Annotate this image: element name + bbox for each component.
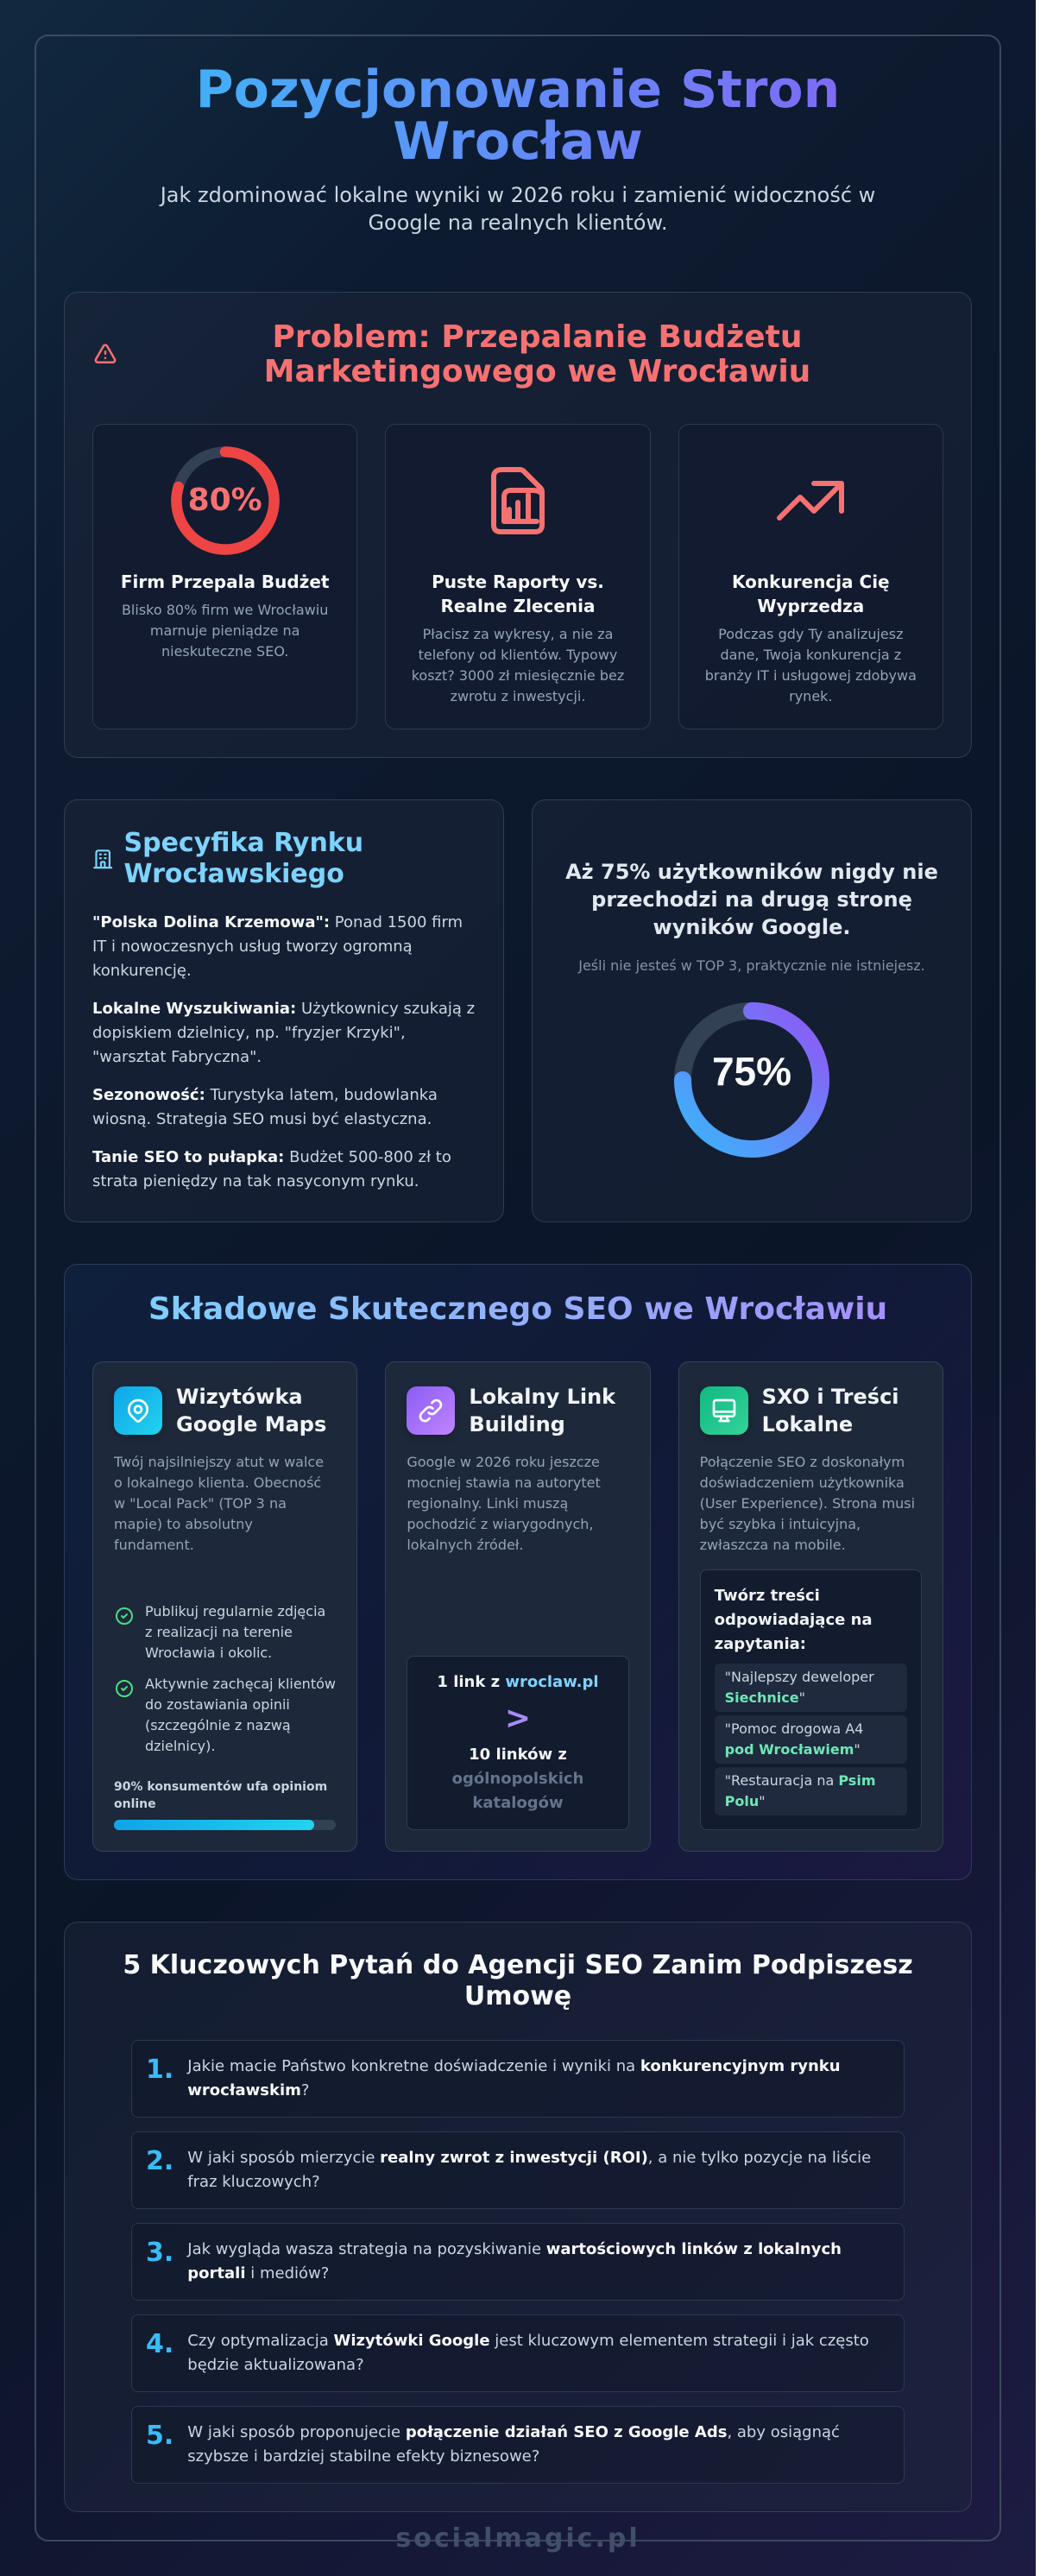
chart: 75% ring xyxy=(674,1002,829,1158)
card: 80 percent xyxy=(92,424,357,729)
title xyxy=(64,64,972,167)
card text: Płacisz za wykresy, a nie za xyxy=(423,626,613,642)
card title xyxy=(176,1385,326,1436)
panel: five questions xyxy=(64,1922,972,2512)
card text: mocniej stawia na autorytet xyxy=(407,1474,601,1491)
question text: W jaki sposób proponujecie połączenie działań SEO z Google Ads, aby osiągnąć xyxy=(187,2423,840,2441)
text: silicon valley: "Polska Dolina Krzemowa": Ponad 1500 firm xyxy=(92,913,463,931)
card text: koszt? 3000 zł miesięcznie bez xyxy=(412,667,624,684)
ten weak links xyxy=(452,1746,583,1812)
questions heading: Umowę xyxy=(464,1981,571,2011)
question text: Jakie macie Państwo konkretne doświadczenie i wyniki na konkurencyjnym rynku xyxy=(187,2057,841,2075)
question 2 xyxy=(131,2131,905,2209)
question text xyxy=(187,2329,869,2377)
stat label: online xyxy=(114,1797,156,1811)
comparison box xyxy=(407,1656,629,1830)
number: 1. xyxy=(146,2055,173,2085)
example query: pod Wrocławiem" xyxy=(725,1741,861,1758)
icon: check xyxy=(116,1680,133,1697)
question text xyxy=(187,2149,871,2191)
problem heading: Problem: Przepalanie Budżetu xyxy=(272,319,803,355)
box heading: zapytania: xyxy=(715,1635,806,1653)
checklist item: dzielnicy). xyxy=(145,1738,215,1754)
text: cheap seo: Tanie SEO to pułapka: Budżet 500-800 zł to xyxy=(92,1148,451,1166)
icon: building xyxy=(93,849,112,868)
card text: Google w 2026 roku jeszcze xyxy=(407,1454,600,1470)
card text: zwrotu z inwestycji. xyxy=(451,688,585,704)
question 5 xyxy=(131,2406,905,2484)
stat label xyxy=(114,1780,327,1811)
card title xyxy=(762,1385,899,1436)
card text: pochodzić z wiarygodnych, xyxy=(407,1516,593,1532)
question text: portali i mediów? xyxy=(187,2264,329,2282)
question 3 xyxy=(131,2223,905,2301)
card title: Building xyxy=(469,1412,565,1436)
icon: report document xyxy=(491,467,545,534)
example query xyxy=(715,1715,907,1764)
statistic heading xyxy=(565,860,938,939)
question text: fraz kluczowych? xyxy=(187,2173,320,2191)
one strong link: 1 link z wroclaw.pl xyxy=(437,1673,599,1691)
card text: telefony od klientów. Typowy xyxy=(419,647,617,663)
market heading xyxy=(124,828,363,889)
checklist item: Publikuj regularnie zdjęcia xyxy=(145,1603,325,1619)
greater-than sign: > xyxy=(505,1701,531,1736)
card text xyxy=(700,1454,915,1553)
card text: Połączenie SEO z doskonałym xyxy=(700,1454,905,1470)
card text xyxy=(705,626,917,704)
card text: o lokalnego klienta. Obecność xyxy=(114,1474,321,1491)
question text: Czy optymalizacja Wizytówki Google jest kluczowym elementem strategii i jak często xyxy=(187,2332,869,2350)
text: local searches: Lokalne Wyszukiwania: Użytkownicy szukają z xyxy=(92,1000,475,1018)
icon: map pin xyxy=(114,1386,162,1435)
box heading xyxy=(715,1587,873,1653)
chart: 75% ring: 75% xyxy=(712,1049,791,1094)
statistic note: Jeśli nie jesteś w TOP 3, praktycznie nie istniejesz. xyxy=(578,957,925,974)
ring value: 80% xyxy=(188,482,262,518)
text: seasonality: Sezonowość: Turystyka latem, budowlanka xyxy=(92,1086,438,1104)
text: silicon valley xyxy=(92,913,463,980)
card title xyxy=(432,571,604,616)
icon: check xyxy=(116,1607,133,1625)
ten weak links: katalogów xyxy=(472,1794,564,1812)
card text: rynek. xyxy=(789,688,833,704)
card title: Realne Zlecenia xyxy=(440,596,596,616)
card text xyxy=(114,1454,324,1553)
text: local searches xyxy=(92,1000,475,1066)
title: Wrocław xyxy=(393,111,643,172)
question text xyxy=(186,2240,842,2282)
footer brand: socialmagic.pl xyxy=(395,2523,640,2554)
text: local searches: "warsztat Fabryczna". xyxy=(92,1048,262,1066)
card text: marnuje pieniądze na xyxy=(150,622,300,639)
card text: Twój najsilniejszy atut w walce xyxy=(114,1454,324,1470)
number: 2. xyxy=(146,2146,173,2176)
example query xyxy=(715,1767,907,1815)
stat label: 90% konsumentów ufa opiniom xyxy=(114,1780,327,1794)
checklist item: Aktywnie zachęcaj klientów xyxy=(145,1676,336,1692)
card title: Lokalny Link xyxy=(469,1385,615,1409)
icon: trending arrow xyxy=(777,481,844,521)
card title: Konkurencja Cię xyxy=(732,571,890,592)
icon: monitor xyxy=(700,1386,748,1435)
card text: lokalnych źródeł. xyxy=(407,1537,523,1553)
text: cheap seo: strata pieniędzy na tak nasyconym rynku. xyxy=(92,1172,419,1190)
panel: problem xyxy=(64,292,972,758)
text: seasonality xyxy=(92,1086,438,1128)
market heading: Wrocławskiego xyxy=(124,859,344,889)
title: Pozycjonowanie Stron xyxy=(196,60,840,120)
chart: 80% ring xyxy=(171,446,280,555)
number: 4. xyxy=(146,2329,173,2359)
card text xyxy=(122,602,328,660)
question text xyxy=(187,2421,840,2469)
card: google maps xyxy=(92,1361,357,1852)
example query: Siechnice" xyxy=(725,1689,805,1706)
card title xyxy=(732,571,890,616)
panel: seo components xyxy=(64,1264,972,1880)
checklist item: do zostawiania opinii xyxy=(145,1696,290,1713)
example query: "Pomoc drogowa A4 xyxy=(725,1720,863,1737)
card text: branży IT i usługowej zdobywa xyxy=(705,667,917,684)
statistic heading: Aż 75% użytkowników nigdy nie xyxy=(565,860,938,884)
card text xyxy=(412,626,624,704)
card title xyxy=(469,1385,616,1436)
text: seasonality: wiosną. Strategia SEO musi być elastyczna. xyxy=(92,1110,432,1128)
example query: "Restauracja na Psim xyxy=(725,1772,875,1789)
card title: Google Maps xyxy=(176,1412,326,1436)
question text: Jak wygląda wasza strategia na pozyskiwanie wartościowych linków z lokalnych xyxy=(187,2240,842,2258)
card: competition xyxy=(678,424,943,729)
card text: mapie) to absolutny xyxy=(114,1516,253,1532)
question 1 xyxy=(131,2040,905,2118)
questions heading xyxy=(123,1950,913,2011)
subtitle: Jak zdominować lokalne wyniki w 2026 roku i zamienić widoczność w xyxy=(161,183,875,207)
statistic heading: wyników Google. xyxy=(653,915,850,939)
card title: Wizytówka xyxy=(176,1385,303,1409)
number: 3. xyxy=(146,2238,173,2268)
card: empty reports xyxy=(385,424,651,729)
progress bar xyxy=(114,1820,336,1830)
question text: W jaki sposób mierzycie realny zwrot z inwestycji (ROI), a nie tylko pozycje na liście xyxy=(187,2149,871,2167)
checklist item xyxy=(145,1603,325,1661)
statistic heading: przechodzi na drugą stronę xyxy=(591,887,912,912)
ten weak links: 10 linków z xyxy=(469,1746,567,1764)
icon: warning triangle xyxy=(95,344,116,363)
panel: market specifics xyxy=(64,799,504,1222)
subtitle xyxy=(159,183,875,235)
question text xyxy=(186,2057,841,2099)
card text: Podczas gdy Ty analizujesz xyxy=(718,626,903,642)
ten weak links: ogólnopolskich xyxy=(452,1770,583,1788)
card text: zwłaszcza na mobile. xyxy=(700,1537,846,1553)
question text: szybsze i bardziej stabilne efekty biznesowe? xyxy=(187,2447,539,2466)
market heading: Specyfika Rynku xyxy=(124,828,363,858)
text: silicon valley: IT i nowoczesnych usług tworzy ogromną xyxy=(92,938,413,956)
questions heading: 5 Kluczowych Pytań do Agencji SEO Zanim Podpiszesz xyxy=(123,1950,913,1980)
subtitle: Google na realnych klientów. xyxy=(368,211,668,235)
text: silicon valley: konkurencję. xyxy=(92,962,192,980)
box heading: Twórz treści xyxy=(715,1587,820,1605)
problem heading: Marketingowego we Wrocławiu xyxy=(264,354,810,389)
card text: fundament. xyxy=(114,1537,194,1553)
example query: Polu" xyxy=(725,1793,766,1809)
card title: Lokalne xyxy=(762,1412,853,1436)
card text: Blisko 80% firm we Wrocławiu xyxy=(122,602,328,618)
problem heading xyxy=(264,319,810,389)
checklist item xyxy=(145,1676,336,1754)
card text: nieskuteczne SEO. xyxy=(161,643,288,660)
card: link building xyxy=(385,1361,651,1852)
icon: link xyxy=(407,1386,455,1435)
card text: (User Experience). Strona musi xyxy=(700,1495,915,1512)
question text: wrocławskim? xyxy=(187,2081,309,2099)
card title: SXO i Treści xyxy=(762,1385,899,1409)
card text xyxy=(407,1454,601,1553)
card text: regionalny. Linki muszą xyxy=(407,1495,568,1512)
panel: 75 percent statistic xyxy=(532,799,972,1222)
text: local searches: dopiskiem dzielnicy, np. "fryzjer Krzyki", xyxy=(92,1024,406,1042)
box heading: odpowiadające na xyxy=(715,1611,873,1629)
example query: "Najlepszy deweloper xyxy=(725,1669,874,1685)
card text: doświadczeniem użytkownika xyxy=(700,1474,905,1491)
query examples box xyxy=(700,1569,922,1830)
number: 5. xyxy=(146,2421,173,2451)
checklist item: Wrocławia i okolic. xyxy=(145,1645,272,1661)
question 4 xyxy=(131,2314,905,2392)
example query xyxy=(715,1664,907,1712)
question text: będzie aktualizowana? xyxy=(187,2356,364,2374)
card title: Firm Przepala Budżet xyxy=(121,571,329,592)
card text: być szybka i intuicyjna, xyxy=(700,1516,861,1532)
text: cheap seo xyxy=(92,1148,451,1190)
checklist item: z realizacji na terenie xyxy=(145,1624,293,1640)
card text: dane, Twoja konkurencja z xyxy=(720,647,901,663)
card: sxo xyxy=(678,1361,943,1852)
card text: w "Local Pack" (TOP 3 na xyxy=(114,1495,287,1512)
components heading: Składowe Skutecznego SEO we Wrocławiu xyxy=(148,1291,887,1327)
card title: Wyprzedza xyxy=(757,596,864,616)
card title: Puste Raporty vs. xyxy=(432,571,604,592)
checklist item: (szczególnie z nazwą xyxy=(145,1717,291,1733)
